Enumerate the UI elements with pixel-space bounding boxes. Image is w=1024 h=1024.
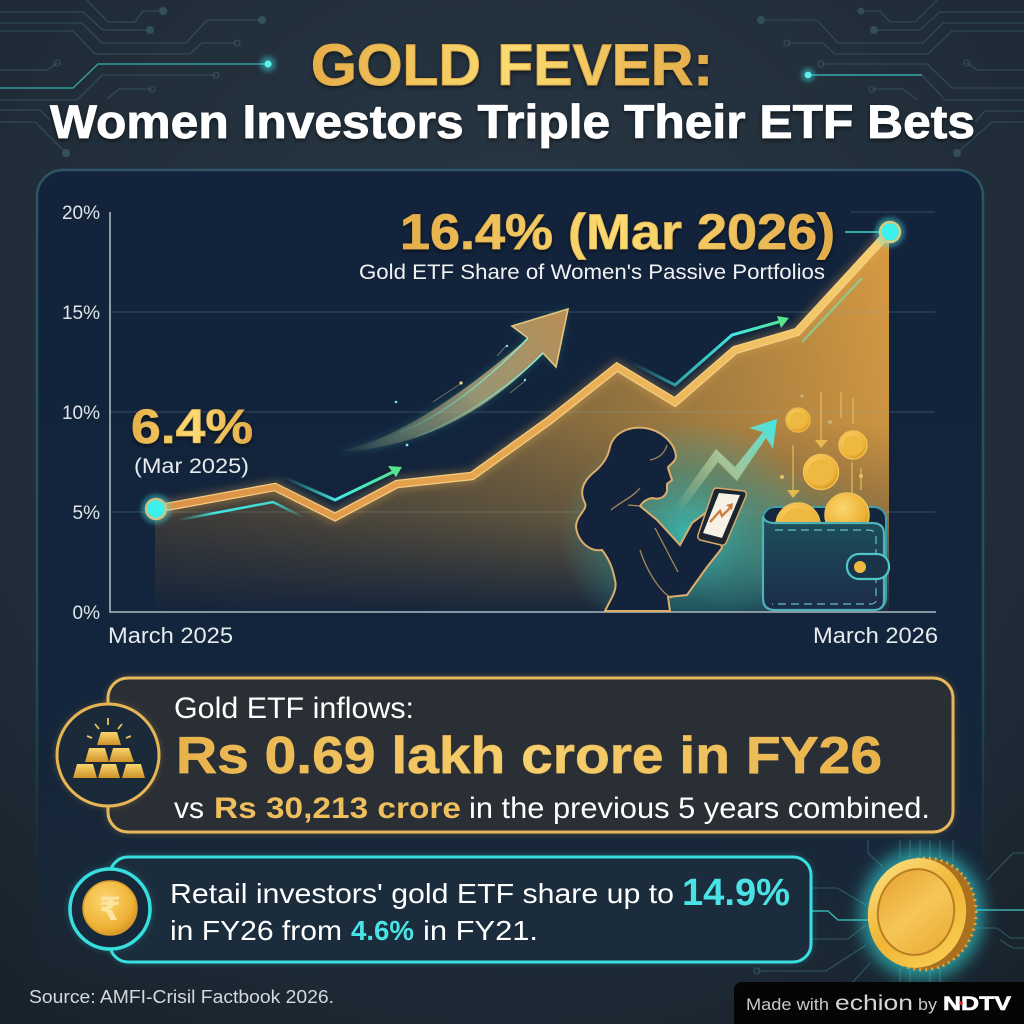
chart: x axis labels: March 2026 [813,623,938,648]
badge: made with echion [734,982,1024,1024]
teal glow behind woman and wallet [570,428,889,611]
chart: y axis labels: 20% [62,203,100,224]
badge: made with echion: echion [835,992,913,1015]
title line: gold: GOLD FEVER: [311,33,713,98]
text: comparison: vs [174,792,204,825]
callout: 16.4%: 16.4% (Mar 2026) [400,204,835,260]
icon: phone [698,488,746,545]
chart: y axis labels: 5% [73,503,100,524]
circuit trace: glowing top right [801,68,922,82]
chart: gridlines [110,212,935,512]
chart: y axis labels: 0% [73,603,100,624]
text: comparison [174,792,930,825]
text: retail line two: 4.6% [351,915,414,946]
title line: white: Women Investors Triple Their ETF Bets [50,95,975,148]
chart: teal accent under start of line [178,502,305,520]
text: inflows value: Rs 0.69 lakh crore in FY26 [176,727,882,785]
icon: rupee coin badge [70,869,150,949]
chart: x axis labels [108,623,938,648]
chart: y axis labels [62,203,100,624]
text: retail line one: 14.9% [682,872,790,914]
circuit traces: top left [0,0,266,156]
text: inflows label: Gold ETF inflows: [174,692,414,725]
chart: y axis labels: 15% [62,303,100,324]
chart: area under line [155,232,889,612]
icon: large gold coin [859,848,985,980]
icon: falling coins [780,392,867,498]
title [50,33,975,148]
icon: rupee coin badge: ₹ [99,890,121,928]
panel: gold ETF inflows [108,678,953,832]
text: source: Source: AMFI-Crisil Factbook 2026. [29,987,334,1007]
chart: gold line [155,232,889,517]
circuit traces: coin connectors [812,910,1024,920]
arrow: large rising arrow [333,309,568,452]
callout: 6.4% [131,401,253,478]
badge: made with echion: by [918,995,938,1014]
text: comparison: Rs 30,213 crore [214,792,461,825]
circuit traces: top right [758,0,1024,156]
icon: woman with phone [576,428,722,611]
circuit trace: glowing top left [0,56,276,88]
chart: green streak under peak [802,278,862,342]
chart: y axis labels: 10% [62,403,100,424]
panel: retail investors [110,857,811,962]
circuit traces: bottom right [754,840,1024,982]
start marker [141,494,171,524]
callout: 6.4%: (Mar 2025) [134,455,249,478]
callout: 16.4% [359,204,835,284]
callout: 6.4%: 6.4% [131,401,253,454]
text: retail line two: in FY26 from [170,915,342,946]
chart: x axis labels: March 2025 [108,623,233,648]
text: comparison: in the previous 5 years combined. [469,792,930,825]
icon: gold bars badge [57,704,159,806]
badge: made with echion: Made with [746,995,829,1014]
arrow: teal segment near peak [630,316,789,385]
callout: 16.4%: Gold ETF Share of Women's Passive Portfolios [359,261,825,284]
text: retail line two [170,915,538,946]
end marker [845,217,905,247]
arrow: small green arrow [283,466,402,500]
text: retail line one: Retail investors' gold ETF share up to [170,878,674,909]
text: retail line one [170,872,790,914]
panel: chart [36,168,984,860]
arrow: phone trend [672,419,777,510]
badge: made with echion: NDTV [943,994,1011,1015]
text: retail line two: in FY21. [423,915,538,946]
icon: wallet [763,493,889,610]
